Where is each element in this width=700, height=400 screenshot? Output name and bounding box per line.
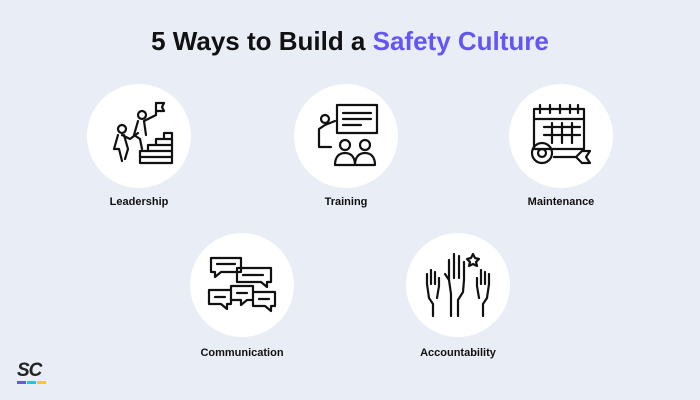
label: accountability: Accountability bbox=[420, 347, 496, 359]
logo: SC bbox=[17, 360, 41, 381]
label: leadership: Leadership bbox=[110, 196, 168, 208]
title: 5 Ways to Build a Safety Culture bbox=[151, 26, 549, 56]
icon: communication bbox=[190, 233, 294, 337]
label: communication: Communication bbox=[200, 347, 284, 359]
label: training: Training bbox=[325, 196, 367, 208]
icon: accountability bbox=[406, 233, 510, 337]
icon: training bbox=[294, 84, 398, 188]
label: maintenance: Maintenance bbox=[528, 196, 594, 208]
icon: maintenance bbox=[509, 84, 613, 188]
icon: leadership bbox=[87, 84, 191, 188]
